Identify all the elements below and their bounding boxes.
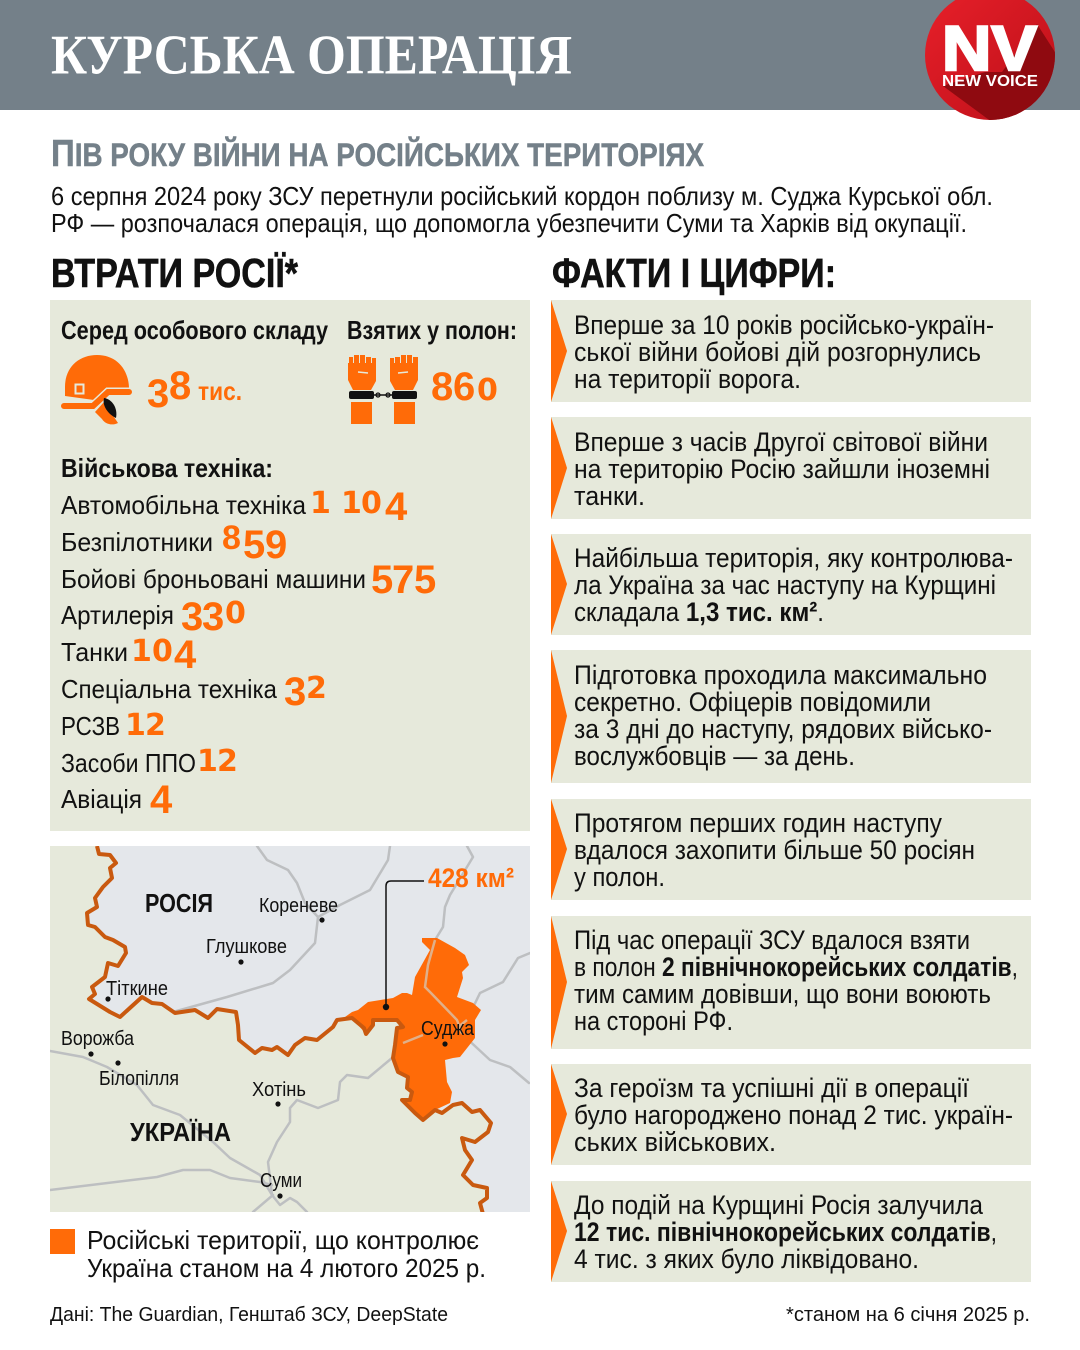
- road through area: [403, 940, 467, 1043]
- fact card 7: було нагороджено понад 2 тис. україн-: [574, 1100, 1013, 1130]
- intro text: [51, 181, 993, 238]
- fact card 5: у полон.: [574, 862, 665, 892]
- fact card 7: За героїзм та успішні дії в операції: [574, 1073, 969, 1103]
- row: drones: 5: [243, 523, 265, 567]
- city: Glushkovo: Глушкове: [206, 936, 287, 958]
- row: tanks: 0: [152, 634, 173, 669]
- row: artillery: 3: [181, 595, 203, 639]
- fact card 1: [551, 300, 1031, 402]
- row: tanks: Танки: [61, 637, 128, 667]
- row: special equipment: [61, 670, 327, 714]
- intro text: РФ — розпочалася операція, що допомогла убезпечити Суми та Харків від окупації.: [51, 208, 967, 238]
- source note: Дані: The Guardian, Генштаб ЗСУ, DeepState: [50, 1304, 448, 1326]
- row: MLRS: 2: [145, 708, 166, 743]
- city: Khotin: Хотінь: [252, 1079, 306, 1101]
- row: armoured vehicles: 7: [392, 558, 414, 602]
- city: Sudzha: Суджа: [421, 1018, 475, 1040]
- panel: losses: [50, 300, 530, 831]
- fact card 1: на території ворога.: [574, 364, 801, 394]
- fact card 4: за 3 дні до наступу, рядових військо-: [574, 714, 992, 744]
- fact card 6: в полон 2 північнокорейських солдатів,: [574, 952, 1018, 982]
- value: 38 thousand: тис.: [198, 376, 242, 406]
- fact card 6: на стороні РФ.: [574, 1006, 733, 1036]
- row: vehicles: 1: [341, 486, 362, 521]
- row: artillery: 3: [202, 595, 224, 639]
- fact card 3: [551, 534, 1031, 635]
- legend: Російські території, що контролює: [87, 1225, 479, 1255]
- row: artillery: Артилерія: [61, 600, 174, 630]
- row: aviation: [61, 778, 173, 822]
- fact card 7: [551, 1064, 1031, 1165]
- row: drones: [61, 519, 287, 567]
- fact card 8: [551, 1181, 1031, 1282]
- fact card 2: [551, 417, 1031, 519]
- roads: [50, 846, 530, 1212]
- row: air defence: 2: [217, 744, 238, 779]
- leader dot: [383, 1004, 389, 1010]
- intro text: 6 серпня 2024 року ЗСУ перетнули російський кордон поблизу м. Суджа Курської обл.: [51, 181, 993, 211]
- fact card 2: танки.: [574, 481, 645, 511]
- row: vehicles: 0: [361, 486, 382, 521]
- row: artillery: 0: [225, 596, 246, 631]
- fact card 5: [551, 799, 1031, 900]
- fact card 2: на територію Росію зайшли іноземні: [574, 454, 990, 484]
- fact card 3: Найбільша територія, яку контролюва-: [574, 543, 1013, 573]
- equipment heading: Військова техніка:: [61, 453, 273, 483]
- row: armoured vehicles: 5: [414, 558, 436, 602]
- row: MLRS: 1: [125, 708, 146, 743]
- fact card 4: Підготовка проходила максимально: [574, 660, 987, 690]
- fact card 6: тим самим довівши, що вони воюють: [574, 979, 991, 1009]
- footnote: *станом на 6 січня 2025 р.: [786, 1304, 1030, 1326]
- row: aviation: 4: [150, 778, 173, 822]
- subtitle: ПІВ РОКУ ВІЙНИ НА РОСІЙСЬКИХ ТЕРИТОРІЯХ: [51, 133, 705, 175]
- label: Ukraine: УКРАЇНА: [130, 1117, 231, 1147]
- row: air defence: 1: [197, 744, 218, 779]
- occupied area: 428 km²: [337, 938, 481, 1120]
- city: Bilopillia: [100, 1060, 178, 1085]
- icon: helmet: [64, 355, 129, 424]
- value: 860: 6: [453, 365, 475, 409]
- fact card 8: До подій на Курщині Росія залучила: [574, 1190, 984, 1220]
- leader line: [386, 881, 424, 1007]
- icon: handcuffed fists: [348, 355, 418, 424]
- fact card 4: секретно. Офіцерів повідомили: [574, 687, 931, 717]
- fact card 6: [551, 916, 1031, 1049]
- row: special equipment: Спеціальна техніка: [61, 674, 278, 704]
- row: drones: 8: [222, 519, 241, 557]
- fact card 1: ської війни бойові дій розгорнулись: [574, 337, 981, 367]
- row: drones: 9: [265, 523, 287, 567]
- legend: [50, 1225, 486, 1283]
- fact card 3: ла Україна за час наступу на Курщині: [574, 570, 996, 600]
- value: 38 thousand: [147, 364, 242, 416]
- row: vehicles: [61, 485, 408, 529]
- fact card 4: вослужбовців — за день.: [574, 741, 855, 771]
- logo: NV New Voice: NV: [942, 14, 1037, 84]
- row: tanks: 1: [131, 634, 152, 669]
- city: Tyotkino: Тіткине: [106, 978, 168, 1000]
- fact card 8: 4 тис. з яких було ліквідовано.: [574, 1244, 919, 1274]
- fact card 5: вдалося захопити більше 50 росіян: [574, 835, 975, 865]
- fact card 3: складала 1,3 тис. км².: [574, 597, 824, 627]
- fact card 8: 12 тис. північнокорейських солдатів,: [574, 1217, 997, 1247]
- city: Sumy: Суми: [260, 1170, 302, 1192]
- fact card 5: Протягом перших годин наступу: [574, 808, 942, 838]
- map: [50, 844, 532, 1214]
- row: artillery: [61, 595, 246, 639]
- row: armoured vehicles: [61, 558, 436, 602]
- value: 38 thousand: 8: [169, 364, 191, 408]
- fact card 7: ських військових.: [574, 1127, 776, 1157]
- row: drones: Безпілотники: [61, 527, 213, 557]
- logo: NV New Voice: [925, 0, 1060, 125]
- row: armoured vehicles: 5: [371, 558, 393, 602]
- heading: losses: ВТРАТИ РОСІЇ*: [51, 250, 298, 296]
- row: armoured vehicles: Бойові броньовані машини: [61, 564, 366, 594]
- logo: NV New Voice: NEW VOICE: [942, 73, 1038, 90]
- heading: facts: ФАКТИ І ЦИФРИ:: [552, 250, 836, 296]
- city: Korenevo: Кореневе: [259, 895, 338, 917]
- personnel label: Серед особового складу: [61, 315, 328, 345]
- label: Russia: РОСІЯ: [145, 888, 213, 918]
- row: aviation: Авіація: [61, 784, 142, 814]
- value: 860: 0: [477, 373, 498, 408]
- border line: [87, 846, 491, 1214]
- value: 860: 8: [431, 365, 453, 409]
- city: Glushkovo: [208, 939, 286, 965]
- city: Bilopillia: Білопілля: [99, 1068, 179, 1090]
- row: vehicles: 1: [310, 486, 331, 521]
- city: Sudzha: [422, 1021, 474, 1047]
- row: tanks: 4: [174, 633, 197, 677]
- city: Vorozhba: Ворожба: [61, 1028, 135, 1050]
- legend: Україна станом на 4 лютого 2025 р.: [87, 1253, 486, 1283]
- fact card 4: [551, 650, 1031, 783]
- row: special equipment: 2: [306, 671, 327, 706]
- row: MLRS: [61, 708, 166, 743]
- city: Korenevo: [260, 898, 338, 923]
- fact card 2: Вперше з часів Другої світової війни: [574, 427, 988, 457]
- value: 38 thousand: 3: [147, 372, 169, 416]
- header band: [0, 0, 1080, 110]
- area label: 428 км²: [428, 863, 514, 893]
- city: Sumy: [260, 1173, 301, 1199]
- row: MLRS: РСЗВ: [61, 711, 120, 741]
- title: КУРСЬКА ОПЕРАЦІЯ: [51, 24, 572, 86]
- value: 860: [431, 365, 498, 409]
- prisoners label: Взятих у полон:: [347, 315, 517, 345]
- row: tanks: [61, 633, 197, 677]
- fact card 1: Вперше за 10 років російсько-україн-: [574, 310, 994, 340]
- territory: Russia: [87, 844, 532, 1214]
- row: vehicles: Автомобільна техніка: [61, 490, 307, 520]
- row: air defence: Засоби ППО: [61, 748, 196, 778]
- row: vehicles: 4: [385, 485, 408, 529]
- fact card 6: Під час операції ЗСУ вдалося взяти: [574, 925, 970, 955]
- row: special equipment: 3: [284, 670, 306, 714]
